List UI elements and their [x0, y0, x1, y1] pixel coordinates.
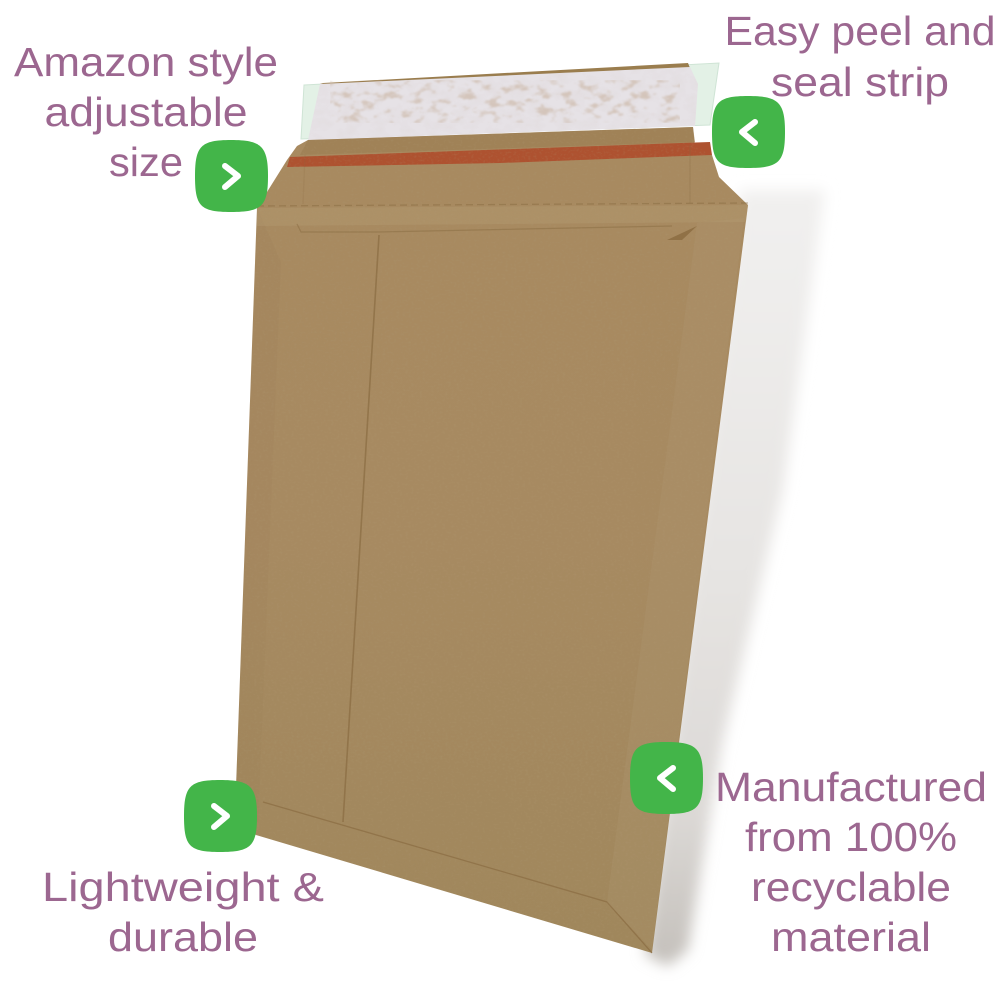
- left panel darker edge: [235, 208, 281, 822]
- label: Manufactured from 100% recyclable material: material: [771, 914, 931, 960]
- mailer body and flap: [235, 127, 748, 953]
- peel strip: [308, 67, 698, 140]
- label: Lightweight & durable: durable: [108, 914, 258, 960]
- icon: arrow right, top left: [195, 140, 268, 212]
- label: Manufactured from 100% recyclable material: Manufactured: [715, 764, 987, 810]
- fold lines: [257, 145, 748, 953]
- top flap edge: [320, 63, 690, 92]
- label: Easy peel and seal strip: seal strip: [771, 59, 949, 105]
- flap crease shading: [300, 127, 695, 155]
- label: Amazon style adjustable size: [14, 39, 278, 185]
- label: Amazon style adjustable size: size: [109, 139, 183, 185]
- label: Manufactured from 100% recyclable material: [715, 764, 987, 960]
- corrugated band: [257, 205, 748, 226]
- label: Lightweight & durable: Lightweight &: [42, 864, 324, 910]
- top right corner crease: [667, 226, 697, 240]
- label: Amazon style adjustable size: Amazon style: [14, 39, 278, 85]
- label: Easy peel and seal strip: [724, 8, 996, 105]
- label: Manufactured from 100% recyclable material: recyclable: [751, 864, 951, 910]
- label: Easy peel and seal strip: Easy peel and: [724, 8, 996, 54]
- label: Manufactured from 100% recyclable material: from 100%: [745, 814, 957, 860]
- mailer drop shadow: [645, 190, 825, 966]
- label: Lightweight & durable: [42, 864, 324, 960]
- icon: arrow left, top right: [712, 96, 785, 168]
- icon: arrow right, bottom left: [184, 780, 257, 852]
- label: Amazon style adjustable size: adjustable: [44, 89, 247, 135]
- icon: arrow left, bottom right: [630, 742, 703, 814]
- release film: [301, 63, 719, 139]
- right flap highlight: [607, 218, 744, 950]
- cardboard mailer: [230, 63, 750, 960]
- seal strip red: [287, 142, 712, 167]
- cardboard grain: [290, 143, 705, 166]
